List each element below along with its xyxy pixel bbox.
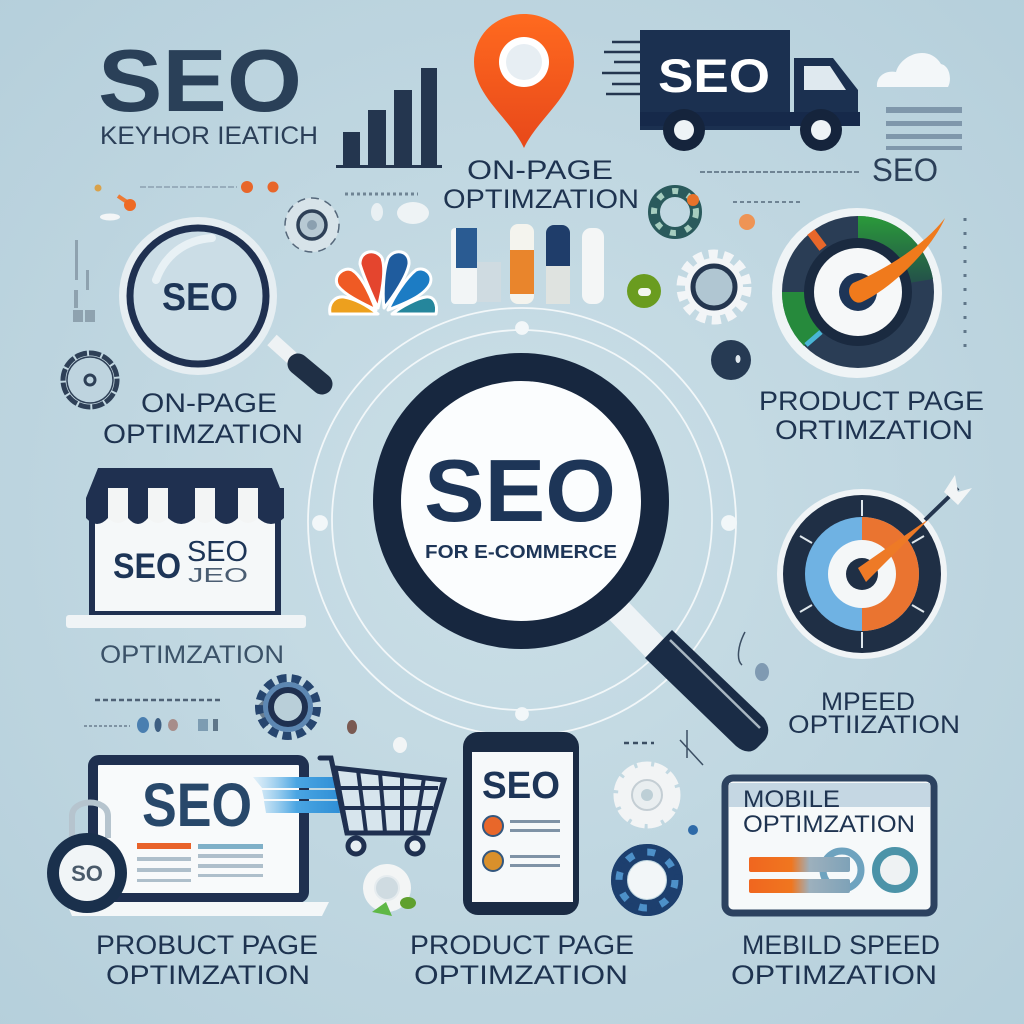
icon: smartphone: SEO — [482, 765, 560, 807]
icon: rainbow peacock fan — [330, 252, 437, 314]
text lines and SEO label: SEO — [872, 152, 938, 188]
icon: storefront — [66, 468, 306, 628]
label: on-page optimization left — [103, 388, 303, 449]
label: mobile speed optimization — [731, 930, 940, 990]
icon: map pin — [474, 14, 574, 148]
icon: magnifier left: SEO — [162, 276, 238, 319]
label: on-page optimization left: OPTIMZATION — [103, 419, 303, 449]
icon: padlock and laptop: SO — [71, 861, 103, 886]
label: on-page optimization top — [443, 155, 639, 214]
label: speed optimization right: MPEED — [821, 688, 915, 716]
icon: dark ball — [711, 340, 751, 380]
label: mobile speed optimization: OPTIMZATION — [731, 960, 937, 990]
icon: gear left — [63, 353, 117, 407]
icon: smartphone — [463, 732, 579, 915]
label: product page optimization right: PRODUCT PAGE — [759, 386, 984, 416]
icon: ring top right — [654, 191, 699, 233]
label: product page optimization bottom center — [410, 930, 634, 990]
icon: delivery truck: SEO — [658, 49, 770, 102]
text lines and SEO label — [872, 107, 962, 188]
label: product page optimization right: ORTIMZATION — [775, 415, 973, 445]
central magnifying glass — [387, 367, 768, 752]
orbit rings — [308, 308, 736, 736]
decorative marks upper left — [73, 181, 278, 322]
icon: storefront: SEO — [113, 547, 181, 586]
label: on-page optimization left: ON-PAGE — [141, 388, 277, 418]
icon: gear center right — [681, 254, 747, 320]
label: product page optimization bottom center: OPTIMZATION — [414, 960, 628, 990]
decorative marks lower right — [624, 632, 769, 835]
icon: magnifier left — [119, 217, 322, 384]
icon: storefront: SEO — [187, 536, 248, 568]
target dial right — [777, 475, 972, 659]
icon: cloud — [877, 53, 950, 87]
icon: blue gear — [615, 848, 679, 912]
label: on-page optimization top: OPTIMZATION — [443, 184, 639, 214]
icon: padlock and laptop — [47, 760, 329, 916]
label: product page optimization bottom left — [96, 930, 318, 990]
icon: green dot — [627, 274, 661, 308]
label: speed optimization right: OPTIIZATION — [788, 711, 960, 739]
icon: delivery truck — [602, 30, 860, 151]
panel: mobile optimization browser card: OPTIMZATION — [743, 811, 915, 838]
central magnifying glass: SEO — [424, 441, 616, 540]
decorative marks lower left — [84, 700, 407, 753]
label: optimization: OPTIMZATION — [100, 641, 284, 669]
label: mobile speed optimization: MEBILD SPEED — [742, 930, 940, 960]
decorative marks upper right — [700, 172, 965, 355]
label: on-page optimization top: ON-PAGE — [467, 155, 613, 185]
icon: white flower gear — [616, 764, 678, 826]
panel: mobile optimization browser card — [725, 778, 934, 913]
icon: gear lower left — [255, 678, 317, 736]
icon: bar chart — [336, 68, 442, 168]
icon: small gear — [285, 198, 339, 252]
heading: SEO keyword research: SEO — [98, 31, 302, 130]
central magnifying glass: FOR E-COMMERCE — [425, 542, 617, 562]
icon: padlock and laptop: SEO — [142, 771, 252, 839]
label: product page optimization bottom left: PROBUCT PAGE — [96, 930, 318, 960]
decorative marks upper middle — [345, 194, 429, 224]
label: speed optimization right — [788, 688, 960, 739]
icon: speed lines and shopping cart — [253, 758, 444, 854]
icon: storefront: JEO — [188, 565, 248, 587]
panel: mobile optimization browser card: MOBILE — [743, 786, 840, 813]
gauge: top right — [772, 208, 945, 378]
label: product page optimization bottom left: OPTIMZATION — [106, 960, 310, 990]
icon: flower bottom — [363, 864, 416, 916]
icon: ink bottles — [451, 224, 604, 304]
label: product page optimization right — [759, 386, 984, 445]
heading: SEO keyword research: KEYHOR IEATICH — [100, 122, 318, 150]
label: product page optimization bottom center: PRODUCT PAGE — [410, 930, 634, 960]
